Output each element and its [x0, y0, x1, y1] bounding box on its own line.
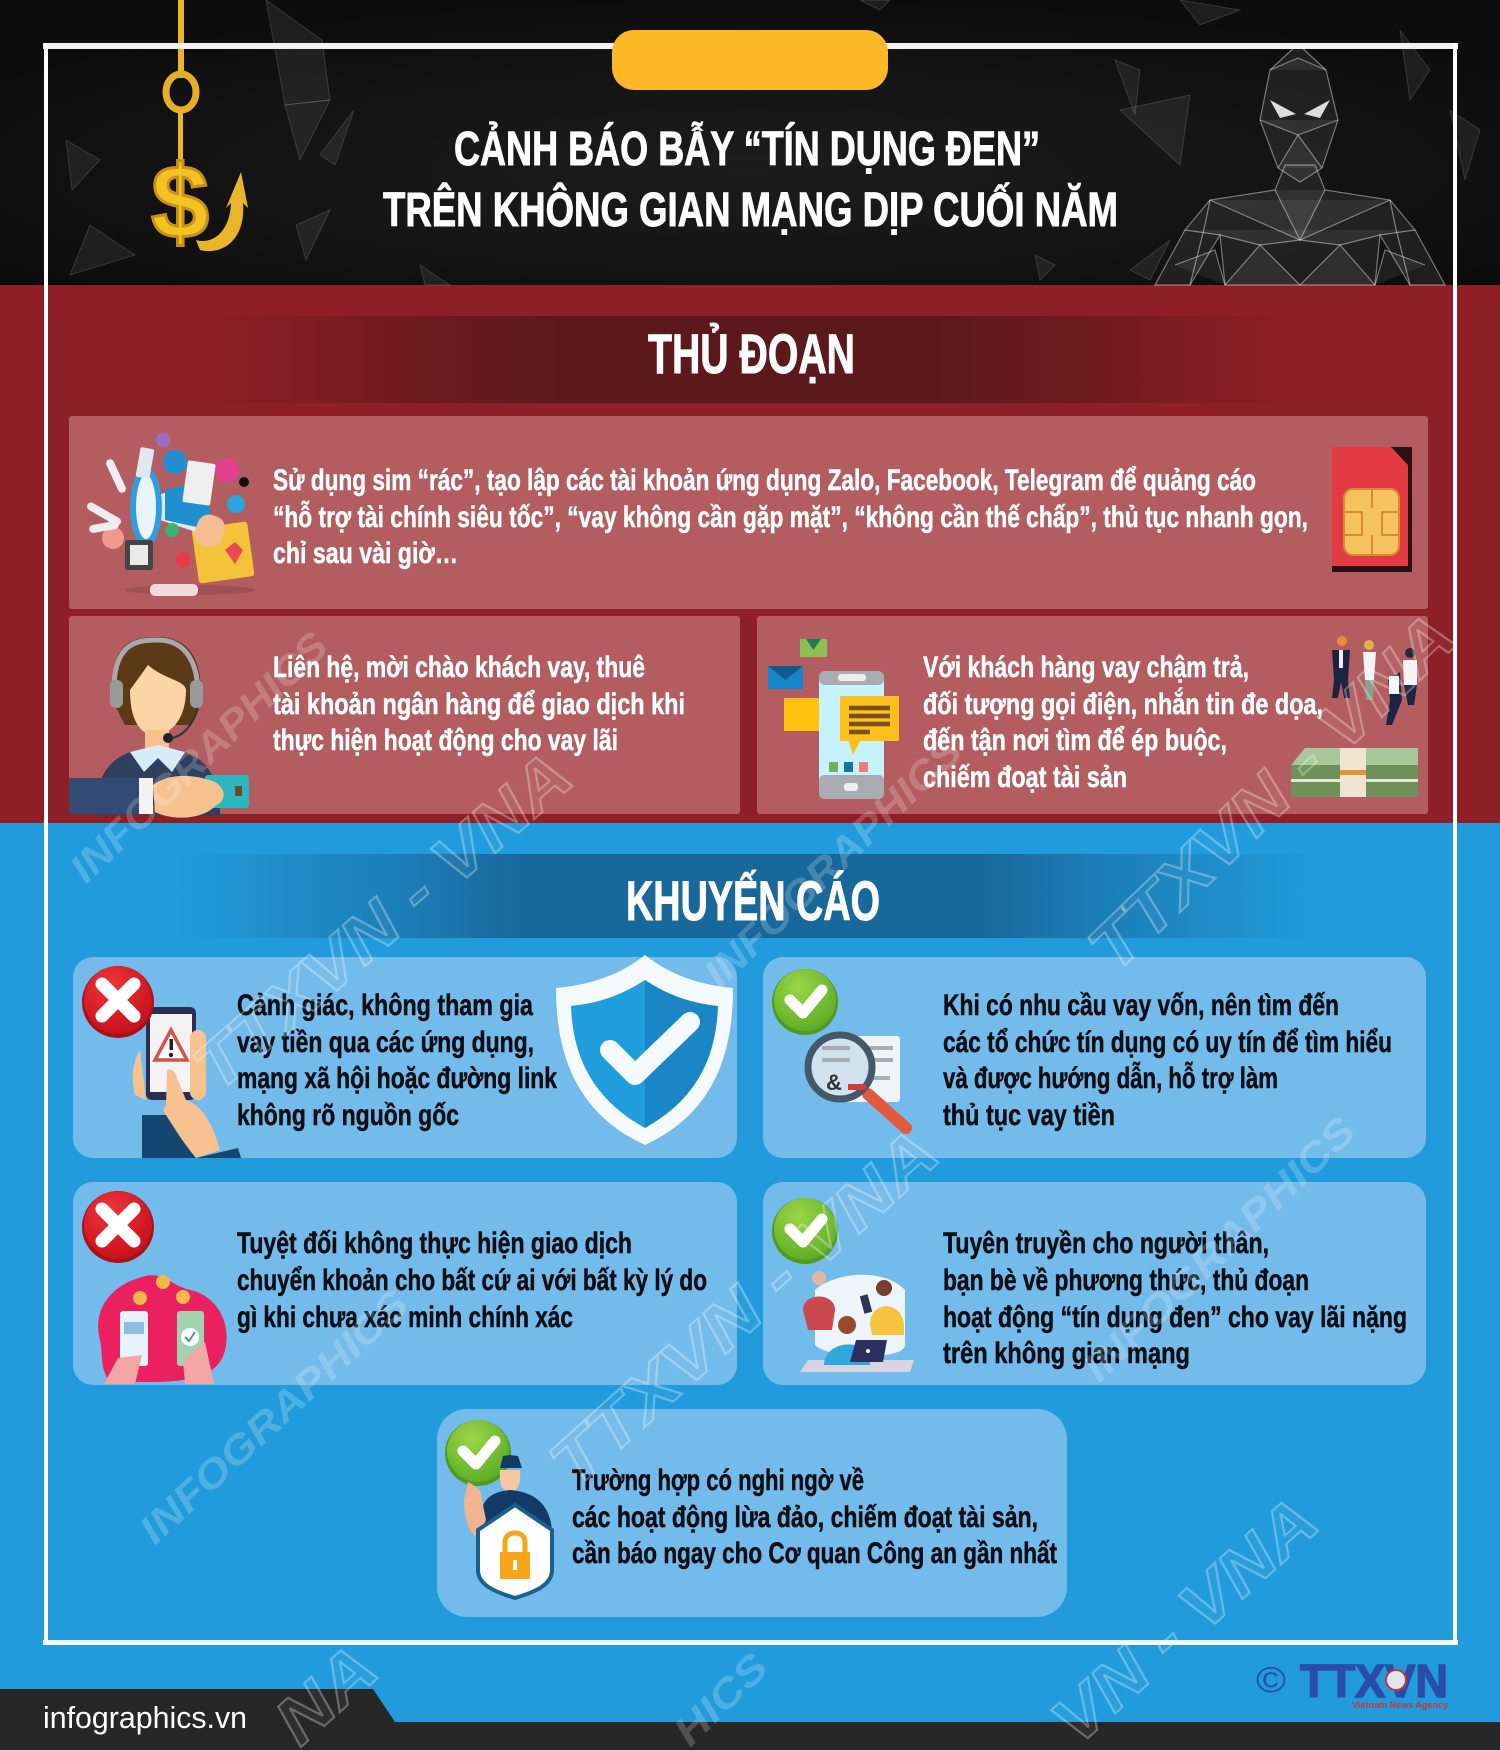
- icon: money transfer between phones: [98, 1275, 227, 1384]
- icon: red cross badge: [82, 1191, 154, 1263]
- panel: fake SIM advertising: [69, 416, 1428, 609]
- panel: inform relatives: [763, 1182, 1426, 1385]
- icon: red cross badge: [82, 966, 154, 1038]
- heading band: KHUYẾN CÁO: [180, 854, 1320, 938]
- icon: debt collectors: [1332, 636, 1417, 725]
- watermarks: [62, 598, 1470, 1750]
- text: đến tận nơi tìm để ép buộc,: [923, 724, 1227, 757]
- text: Tuyên truyền cho người thân,: [943, 1227, 1269, 1260]
- text: Khi có nhu cầu vay vốn, nên tìm đến: [943, 989, 1339, 1022]
- icon: dollar fish hook: $: [151, 145, 209, 261]
- panel: credit institutions advice: [763, 957, 1426, 1158]
- icon: green check badge: [772, 969, 838, 1035]
- watermarks: INFOGRAPHICS: [696, 728, 971, 996]
- footer bar: [0, 1689, 1500, 1750]
- title: TRÊN KHÔNG GIAN MẠNG DỊP CUỐI NĂM: [383, 182, 1118, 237]
- logo: TTXVN: TTXVN: [1300, 1655, 1448, 1707]
- section background: blue: [0, 823, 1500, 1750]
- text: các hoạt động lừa đảo, chiếm đoạt tài sản,: [572, 1501, 1038, 1534]
- icon: stacks of money: [1291, 748, 1418, 797]
- text: gì khi chưa xác minh chính xác: [237, 1301, 573, 1334]
- title: [383, 121, 1118, 237]
- text: Liên hệ, mời chào khách vay, thuê: [273, 651, 645, 684]
- icon: green check badge: [445, 1420, 511, 1486]
- text: [273, 651, 685, 757]
- icon: green check badge: [772, 1198, 838, 1264]
- text: [273, 464, 1308, 570]
- background shards: [66, 0, 1480, 285]
- section background: header: [0, 0, 1500, 286]
- panel: threats and coercion: [757, 616, 1428, 814]
- text: Với khách hàng vay chậm trả,: [923, 651, 1249, 684]
- yellow pill: [612, 30, 888, 90]
- icon: phone with messages: [768, 639, 899, 799]
- icon: call-centre agent: [69, 637, 249, 818]
- icon: hand holding phone with warning: [133, 1007, 241, 1158]
- text: trên không gian mạng: [943, 1337, 1190, 1370]
- icon: security shield with check: [556, 955, 733, 1145]
- text: Trường hợp có nghi ngờ về: [572, 1464, 864, 1497]
- panel: do not borrow through apps: [73, 955, 737, 1158]
- watermarks: INFOGRAPHICS: [62, 623, 337, 891]
- text: chiếm đoạt tài sản: [923, 761, 1127, 794]
- watermarks: INFOGRAPHICS: [1075, 1108, 1364, 1390]
- heading band: KHUYẾN CÁO: KHUYẾN CÁO: [626, 869, 880, 932]
- watermarks: TTXVN - VNA: [1073, 598, 1470, 985]
- text: bạn bè về phương thức, thủ đoạn: [943, 1264, 1309, 1297]
- text: [237, 1227, 707, 1334]
- text: thực hiện hoạt động cho vay lãi: [273, 724, 618, 757]
- text: vay tiền qua các ứng dụng,: [237, 1026, 534, 1059]
- logo: TTXVN: Vietnam News Agency: [1352, 1700, 1448, 1710]
- text: cần báo ngay cho Cơ quan Công an gần nhất: [572, 1537, 1057, 1570]
- footer site name: infographics.vn: [43, 1700, 247, 1735]
- text: Cảnh giác, không tham gia: [237, 989, 533, 1022]
- heading band: THỦ ĐOẠN: [200, 316, 1300, 403]
- text: không rõ nguồn gốc: [237, 1099, 459, 1132]
- icon: magnifier on document: [808, 1035, 906, 1128]
- text: đối tượng gọi điện, nhắn tin đe dọa,: [923, 687, 1323, 721]
- icon: shadowy hacker figure: [1155, 44, 1445, 285]
- text: [943, 989, 1392, 1132]
- text: [237, 989, 557, 1132]
- watermarks: TTXVN - VNA: [179, 737, 586, 1105]
- text: Tuyệt đối không thực hiện giao dịch: [237, 1227, 632, 1260]
- watermarks: INFOGRAPHICS: [131, 1281, 417, 1553]
- text: thủ tục vay tiền: [943, 1099, 1115, 1132]
- title: CẢNH BÁO BẪY “TÍN DỤNG ĐEN”: [454, 121, 1040, 176]
- text: [943, 1227, 1407, 1370]
- heading band: THỦ ĐOẠN: THỦ ĐOẠN: [648, 322, 855, 385]
- icon: police officer with padlock shield: [464, 1455, 552, 1598]
- icon: SIM card: [1332, 447, 1412, 572]
- text: chỉ sau vài giờ…: [273, 537, 458, 570]
- icon: social media megaphone: [86, 433, 255, 596]
- icon: magnifier on document: &: [826, 1070, 842, 1095]
- panel: no bank transfers: [73, 1182, 737, 1385]
- section background: red: [0, 285, 1500, 824]
- icon: people sharing information online: [800, 1271, 914, 1372]
- watermarks: TTXVN - VNA: [535, 1114, 952, 1500]
- text: [923, 651, 1323, 794]
- text: chuyển khoản cho bất cứ ai với bất kỳ lý do: [237, 1264, 707, 1297]
- text: [572, 1464, 1057, 1570]
- text: và được hướng dẫn, hỗ trợ làm: [943, 1061, 1278, 1095]
- panel: contact and rent bank accounts: [69, 616, 740, 818]
- panel: report to police: [437, 1409, 1067, 1617]
- icon: dollar fish hook: [151, 0, 248, 261]
- logo: TTXVN: ©: [1256, 1659, 1286, 1700]
- text: tài khoản ngân hàng để giao dịch khi: [273, 688, 685, 721]
- text: mạng xã hội hoặc đường link: [237, 1062, 557, 1095]
